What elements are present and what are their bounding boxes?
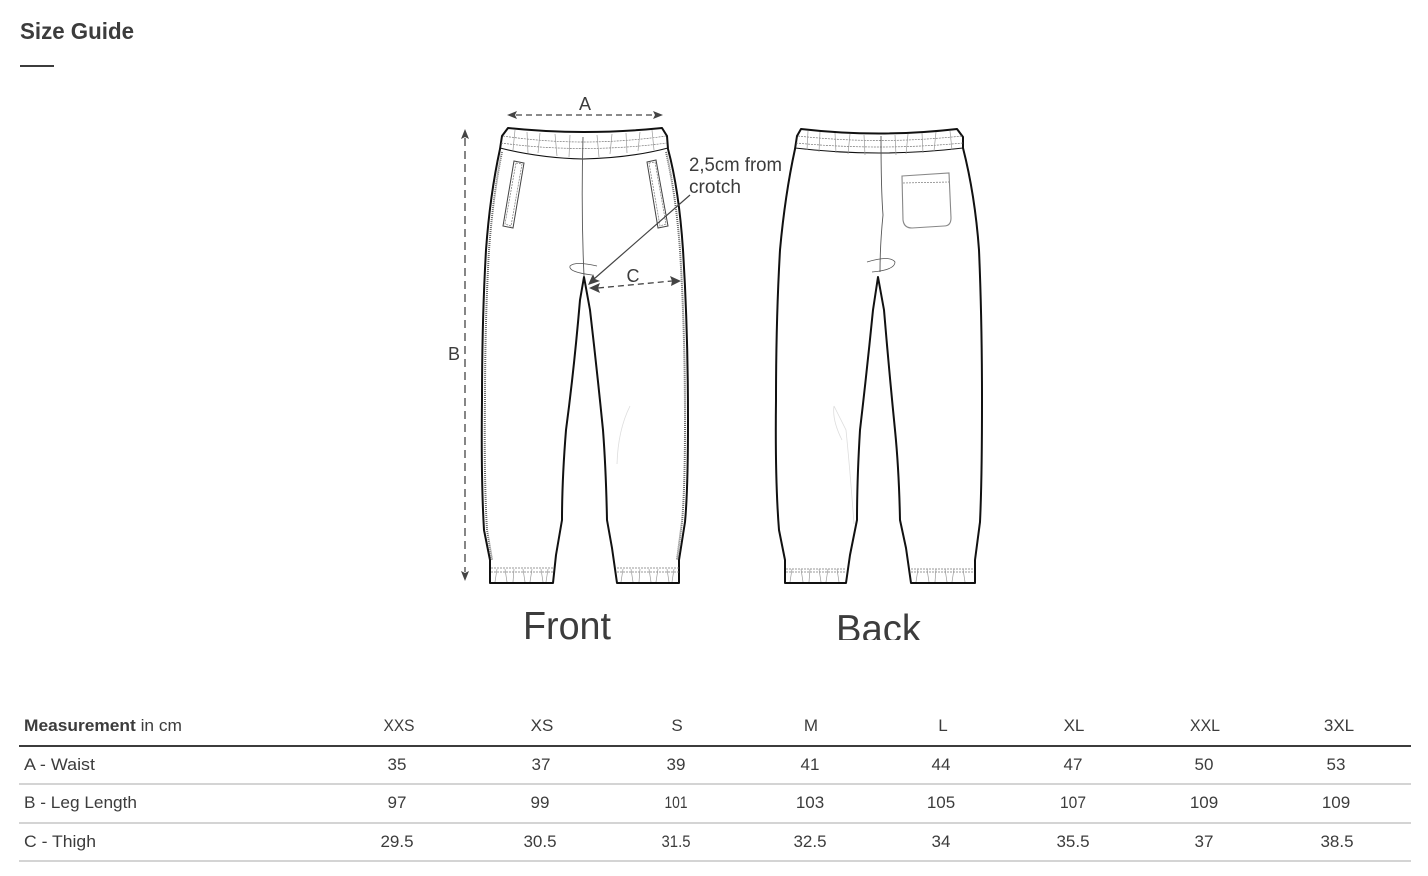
callout: 2,5cm from crotch: 2,5cm from <box>689 155 782 176</box>
row: waist: 41 <box>801 755 819 774</box>
row: thigh: 29.5 <box>380 832 414 851</box>
row: thigh: 35.5 <box>1056 832 1090 851</box>
row: thigh: 38.5 <box>1320 832 1354 851</box>
label: Front: Front <box>523 605 611 648</box>
row: leg length: 107 <box>1060 793 1086 812</box>
row: waist <box>19 755 1411 784</box>
row: leg length: 101 <box>664 793 688 812</box>
measure C arrow <box>589 266 681 293</box>
pocket left <box>503 161 524 228</box>
row: leg length: 99 <box>531 793 549 812</box>
row: waist: A - Waist <box>24 755 95 774</box>
row: waist: 50 <box>1195 755 1213 774</box>
row: waist: 44 <box>932 755 950 774</box>
measure B arrow <box>448 129 469 581</box>
row: leg length: 105 <box>927 793 955 812</box>
table header: XXL <box>1190 716 1220 735</box>
measure B arrow: B <box>448 344 460 364</box>
table header: XXS <box>384 716 414 735</box>
row: thigh: 37 <box>1195 832 1213 851</box>
table header: S <box>671 716 683 735</box>
table header: XS <box>531 716 553 735</box>
row: thigh <box>19 832 1411 861</box>
table header <box>19 716 1411 747</box>
title: Size Guide <box>20 18 134 44</box>
table header: XL <box>1064 716 1084 735</box>
row: waist: 39 <box>667 755 685 774</box>
measure A arrow: A <box>579 94 591 114</box>
row: leg length <box>19 793 1411 823</box>
measure C arrow: C <box>626 266 640 286</box>
row: waist: 47 <box>1064 755 1082 774</box>
front pants drawing <box>482 128 688 583</box>
front cuffs <box>491 568 679 572</box>
table header: M <box>804 716 818 735</box>
table header: Measurement in cm <box>24 716 182 735</box>
pocket right <box>647 160 668 228</box>
row: waist: 37 <box>532 755 550 774</box>
back cuffs <box>786 569 973 572</box>
title <box>20 18 134 67</box>
row: thigh: 30.5 <box>523 832 557 851</box>
back pants drawing <box>776 129 982 583</box>
row: waist: 35 <box>388 755 406 774</box>
row: thigh: 31.5 <box>662 832 690 851</box>
measure A arrow <box>507 94 663 119</box>
row: thigh: 32.5 <box>793 832 827 851</box>
row: leg length: 103 <box>796 793 824 812</box>
row: leg length: 109 <box>1322 793 1350 812</box>
back pocket <box>902 173 951 228</box>
table header: L <box>938 716 948 735</box>
row: leg length: 109 <box>1190 793 1218 812</box>
size table <box>19 716 1411 861</box>
row: leg length: 97 <box>388 793 406 812</box>
row: leg length: B - Leg Length <box>24 793 137 812</box>
row: thigh: 34 <box>932 832 950 851</box>
row: waist: 53 <box>1327 755 1345 774</box>
callout: 2,5cm from crotch <box>588 155 782 285</box>
label: Back (cut off at the bottom): Back <box>836 608 921 651</box>
table header: 3XL <box>1324 716 1354 735</box>
row: thigh: C - Thigh <box>24 832 96 851</box>
callout: 2,5cm from crotch: crotch <box>689 177 741 198</box>
